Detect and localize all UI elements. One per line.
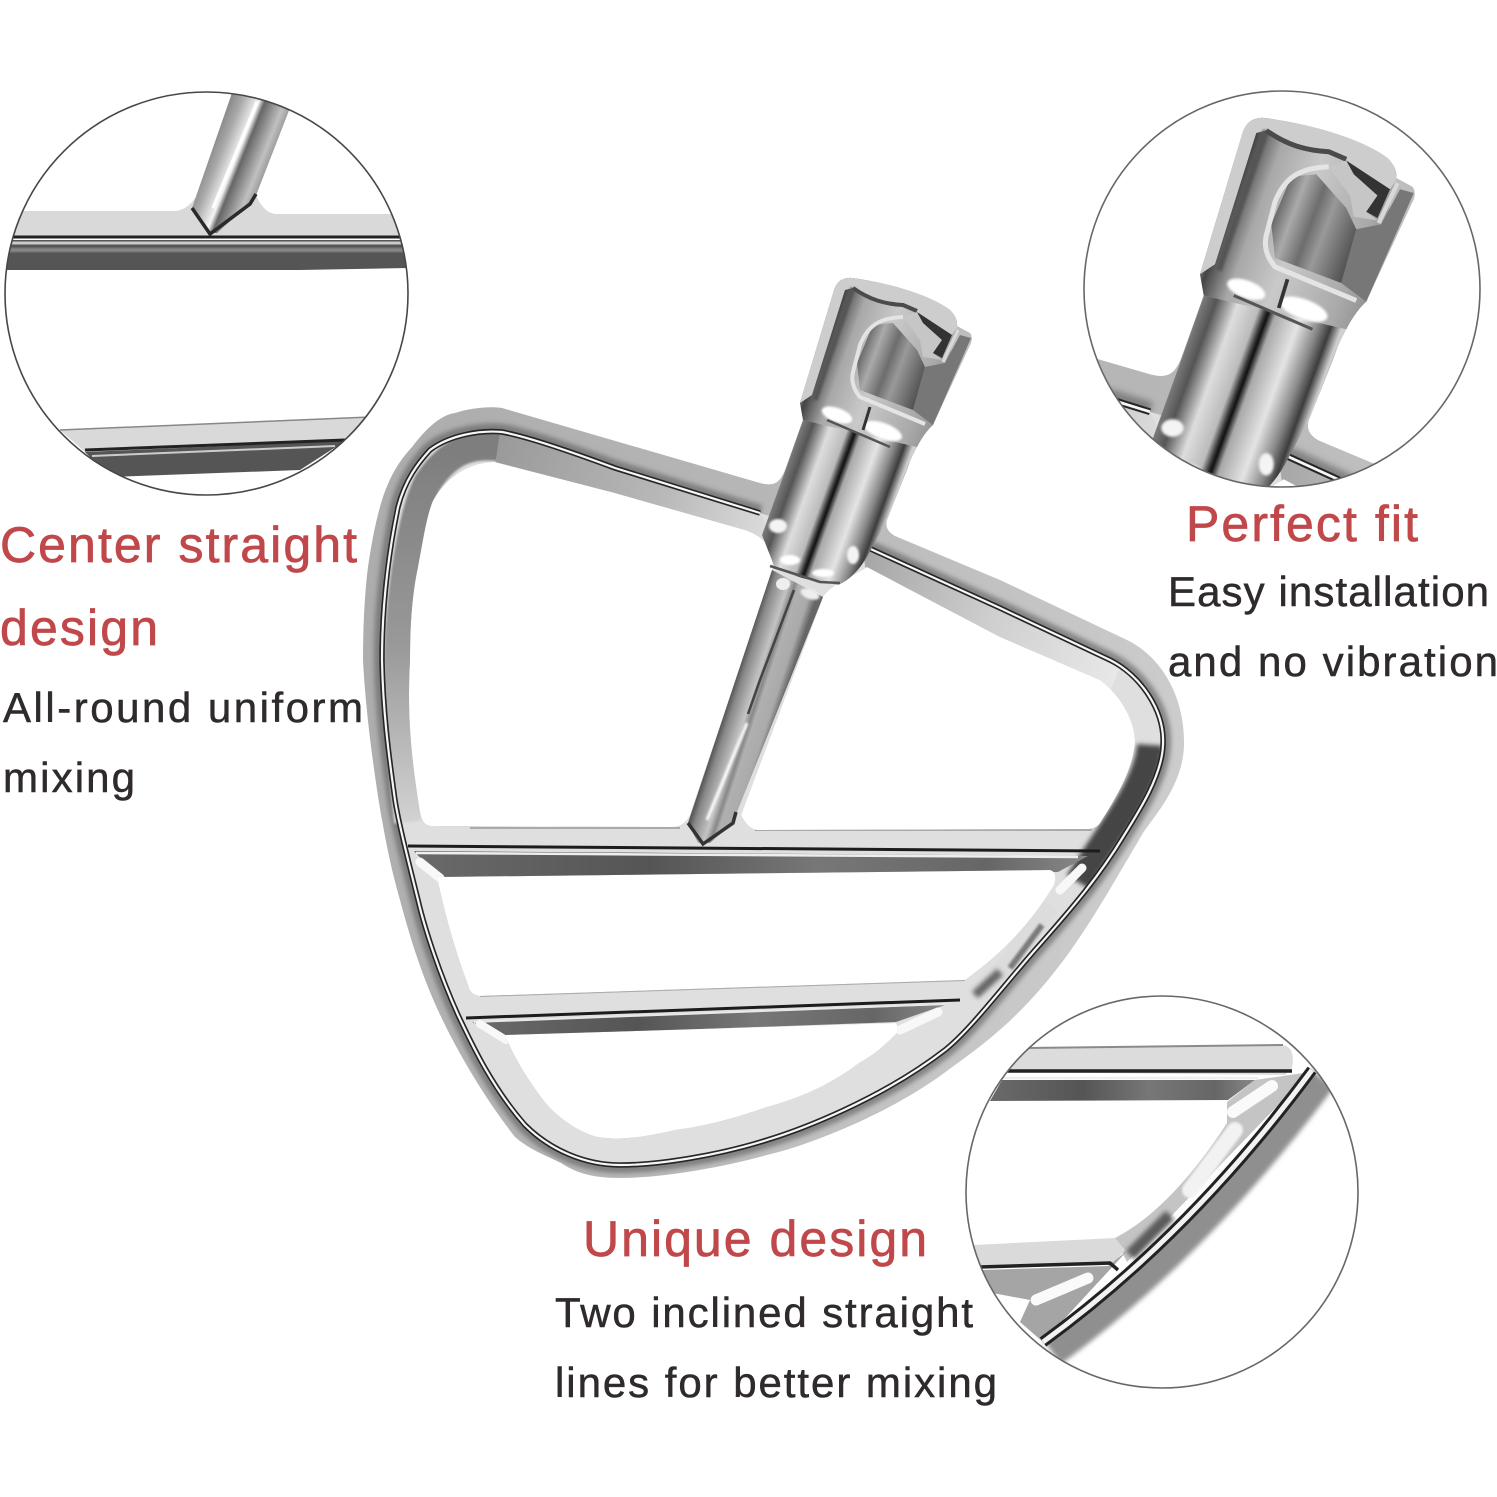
text block: easy installation: Easy installation bbox=[1168, 568, 1489, 615]
text block: uniform mixing bbox=[3, 684, 363, 801]
panel: perfect fit detail circle bbox=[1083, 90, 1481, 488]
panel: center detail circle bbox=[0, 90, 408, 495]
heading: Perfect fit: Perfect fit bbox=[1186, 496, 1418, 552]
main flat beater product image bbox=[363, 278, 1184, 1178]
text block: inclined lines: lines for better mixing bbox=[555, 1359, 997, 1406]
text block: uniform mixing: All-round uniform bbox=[3, 684, 363, 731]
heading: Center straight design bbox=[0, 517, 357, 656]
text block: inclined lines bbox=[555, 1289, 997, 1406]
text block: easy installation bbox=[1168, 568, 1497, 685]
text block: inclined lines: Two inclined straight bbox=[555, 1289, 973, 1336]
text block: uniform mixing: mixing bbox=[3, 754, 135, 801]
heading: Unique design: Unique design bbox=[583, 1211, 927, 1267]
panel: inclined lines detail circle bbox=[966, 996, 1358, 1388]
heading: Center straight design: Center straight bbox=[0, 517, 357, 573]
text block: easy installation: and no vibration bbox=[1168, 638, 1497, 685]
heading: Center straight design: design bbox=[0, 600, 158, 656]
